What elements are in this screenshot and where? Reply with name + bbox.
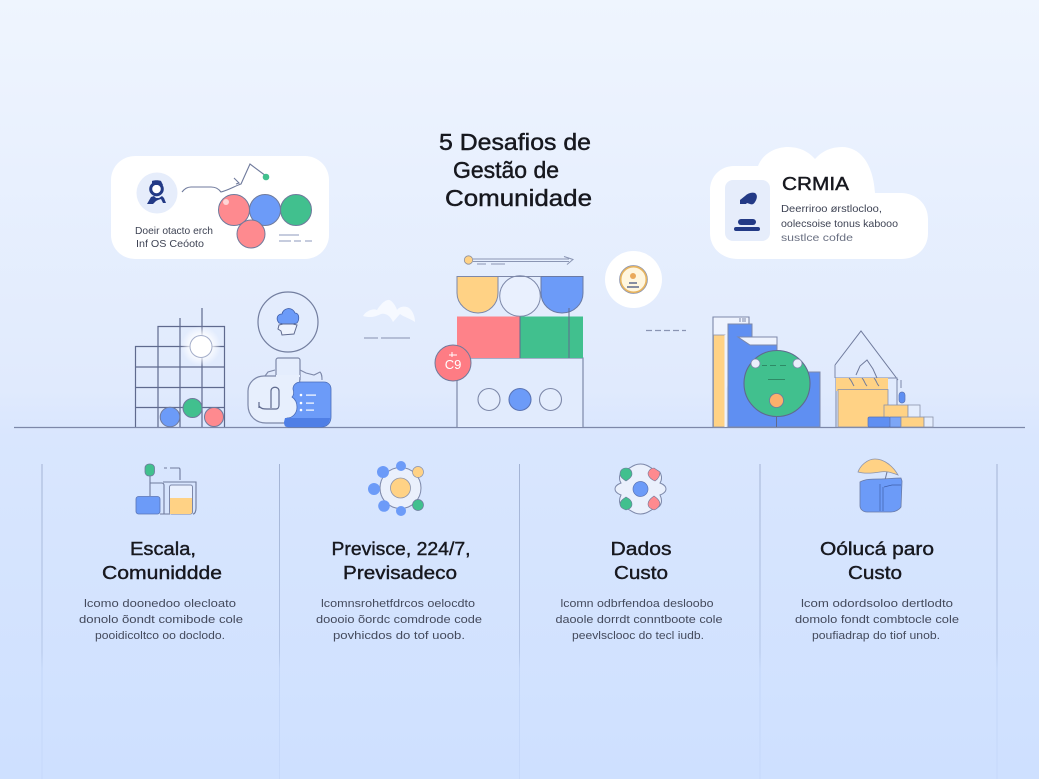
body text: daoole dorrdt conntboote cole <box>556 614 722 626</box>
title: Comunidade <box>445 185 592 211</box>
icon: CRM tile <box>725 180 770 241</box>
small dashes <box>279 235 312 241</box>
body text: pooidicoltco oo doclodo. <box>95 630 225 642</box>
arrow: top of tower <box>464 256 573 264</box>
body text: peevlsclooc do tecl iudb. <box>572 630 704 642</box>
CRM description: sustlce cofde <box>781 232 853 244</box>
body text: donolo õondt comibode cole <box>79 614 243 626</box>
CRM heading: CRMIA <box>782 173 850 194</box>
body text <box>556 598 722 642</box>
body text: lcomn odbrfendoa desloobo <box>560 598 714 610</box>
tower coloured blocks <box>457 308 583 358</box>
profile card text <box>135 225 213 250</box>
column 2: Previsão <box>316 461 482 642</box>
illustration: central tower <box>435 276 583 427</box>
CRM description <box>781 203 898 244</box>
illustration: device with list <box>248 358 331 427</box>
body text: doooio õordc comdrode code <box>316 614 482 626</box>
icon: paper birds <box>363 300 415 338</box>
title: Gestão de <box>453 157 559 183</box>
illustration: blue machine <box>713 317 820 427</box>
icon: gear with nodes <box>368 461 424 516</box>
body text: poufiadrap do tiof unob. <box>812 630 940 642</box>
CRM description: oolecsoise tonus kabooo <box>781 218 898 230</box>
tower base <box>457 358 583 427</box>
icon: umbrella and boxes <box>858 459 902 512</box>
heading: Solução: Custo <box>848 562 902 583</box>
body text: domolo fondt combtocle cole <box>795 614 959 626</box>
icon: person avatar <box>136 172 178 214</box>
tower circles <box>478 388 562 410</box>
illustration: building grid <box>136 308 225 427</box>
heading: Solução <box>820 538 934 583</box>
profile card text: Inf OS Ceóoto <box>136 238 204 250</box>
trend line with green node <box>182 164 269 192</box>
red badge <box>435 345 471 381</box>
icon: coin badge <box>605 251 662 308</box>
illustration: house and boxes <box>835 331 933 427</box>
heading: Escala: Comuniddde <box>102 562 222 583</box>
icon: cloud in circle <box>258 292 318 352</box>
body text: lcomo doonedoo olecloato <box>84 598 236 610</box>
ground line <box>14 426 1025 428</box>
title <box>439 129 592 211</box>
panel: profile card <box>111 156 329 259</box>
body text <box>316 598 482 642</box>
panel: CRM cloud card <box>710 147 928 259</box>
heading: Dados: Custo <box>614 562 668 583</box>
title: 5 Desafios de <box>439 129 591 155</box>
column dividers <box>42 464 997 779</box>
heading: Dados: Dados <box>610 538 672 559</box>
heading: Previsão: Previsce, 224/7, <box>332 538 470 559</box>
column 4: Solução <box>795 459 959 642</box>
body text: lcomnsrohetfdrcos oelocdto <box>321 598 475 610</box>
dashes <box>646 330 686 332</box>
CRM description: Deerriroo ørstlocloo, <box>781 203 882 215</box>
heading: Previsão: Previsadeco <box>343 562 457 583</box>
profile card text: Doeir otacto erch <box>135 225 213 237</box>
body text <box>79 598 243 642</box>
icon: lab vessels <box>136 464 196 514</box>
icon: network flower <box>615 464 666 514</box>
heading: Dados <box>610 538 672 583</box>
body text: povhicdos do tof uoob. <box>333 630 465 642</box>
tower top shapes <box>457 276 583 316</box>
body text <box>795 598 959 642</box>
heading: Previsão <box>332 538 470 583</box>
red badge: C9 <box>445 357 461 372</box>
body text: lcom odordsoloo dertlodto <box>801 598 953 610</box>
coloured circles <box>218 194 312 248</box>
heading: Solução: Oólucá paro <box>820 538 934 559</box>
heading: Escala: Escala, <box>130 538 196 559</box>
column 1: Escala <box>79 464 243 642</box>
column 3: Dados <box>556 464 722 642</box>
heading: Escala <box>102 538 222 583</box>
